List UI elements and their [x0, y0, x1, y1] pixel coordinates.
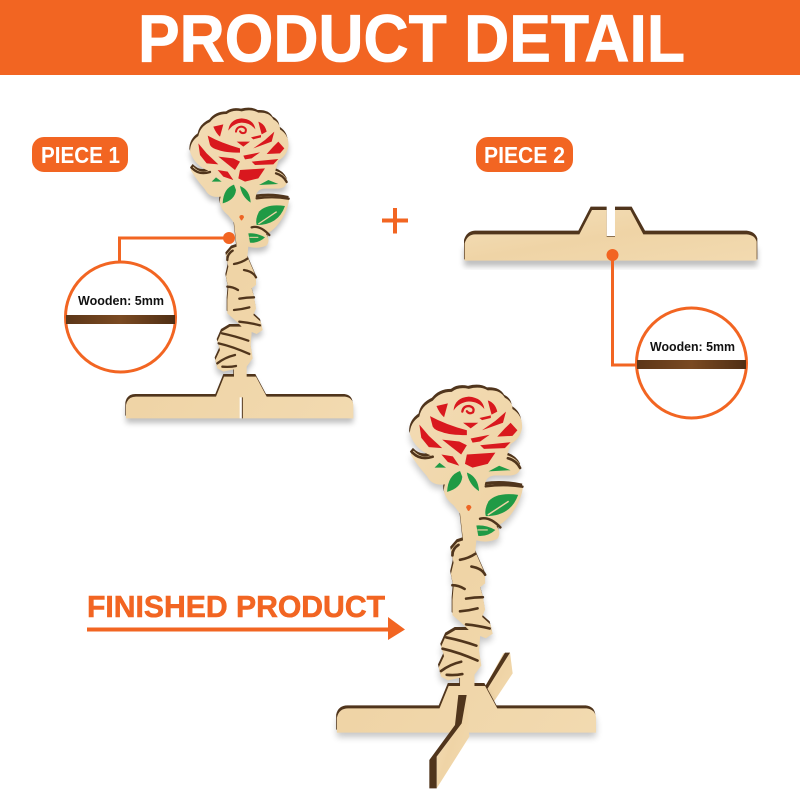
badge: piece 2 [476, 137, 573, 172]
callout circle: piece 2 thickness: Wooden: 5mm [650, 339, 735, 354]
title: PRODUCT DETAIL [138, 2, 685, 76]
callout line: piece 2 [606, 249, 637, 365]
plus sign [382, 208, 408, 234]
product: piece 1 rose with name stem [125, 108, 353, 423]
callout circle: piece 1 thickness: Wooden: 5mm [78, 293, 164, 308]
rose with name stem and base [336, 385, 596, 737]
product: piece 2 base [464, 206, 757, 266]
arrow [87, 617, 405, 640]
product: finished assembled stand [336, 385, 596, 788]
badge: piece 1 [32, 137, 128, 172]
cross piece front [429, 695, 469, 788]
callout circle: piece 2 thickness [636, 308, 746, 418]
badge: piece 2: PIECE 2 [484, 142, 565, 168]
finished product label: FINISHED PRODUCT [87, 589, 385, 624]
header banner [0, 0, 800, 76]
cross piece rear [483, 653, 513, 705]
callout line: piece 1 [120, 232, 235, 262]
callout circle: piece 1 thickness [66, 262, 176, 372]
badge: piece 1: PIECE 1 [41, 142, 120, 168]
